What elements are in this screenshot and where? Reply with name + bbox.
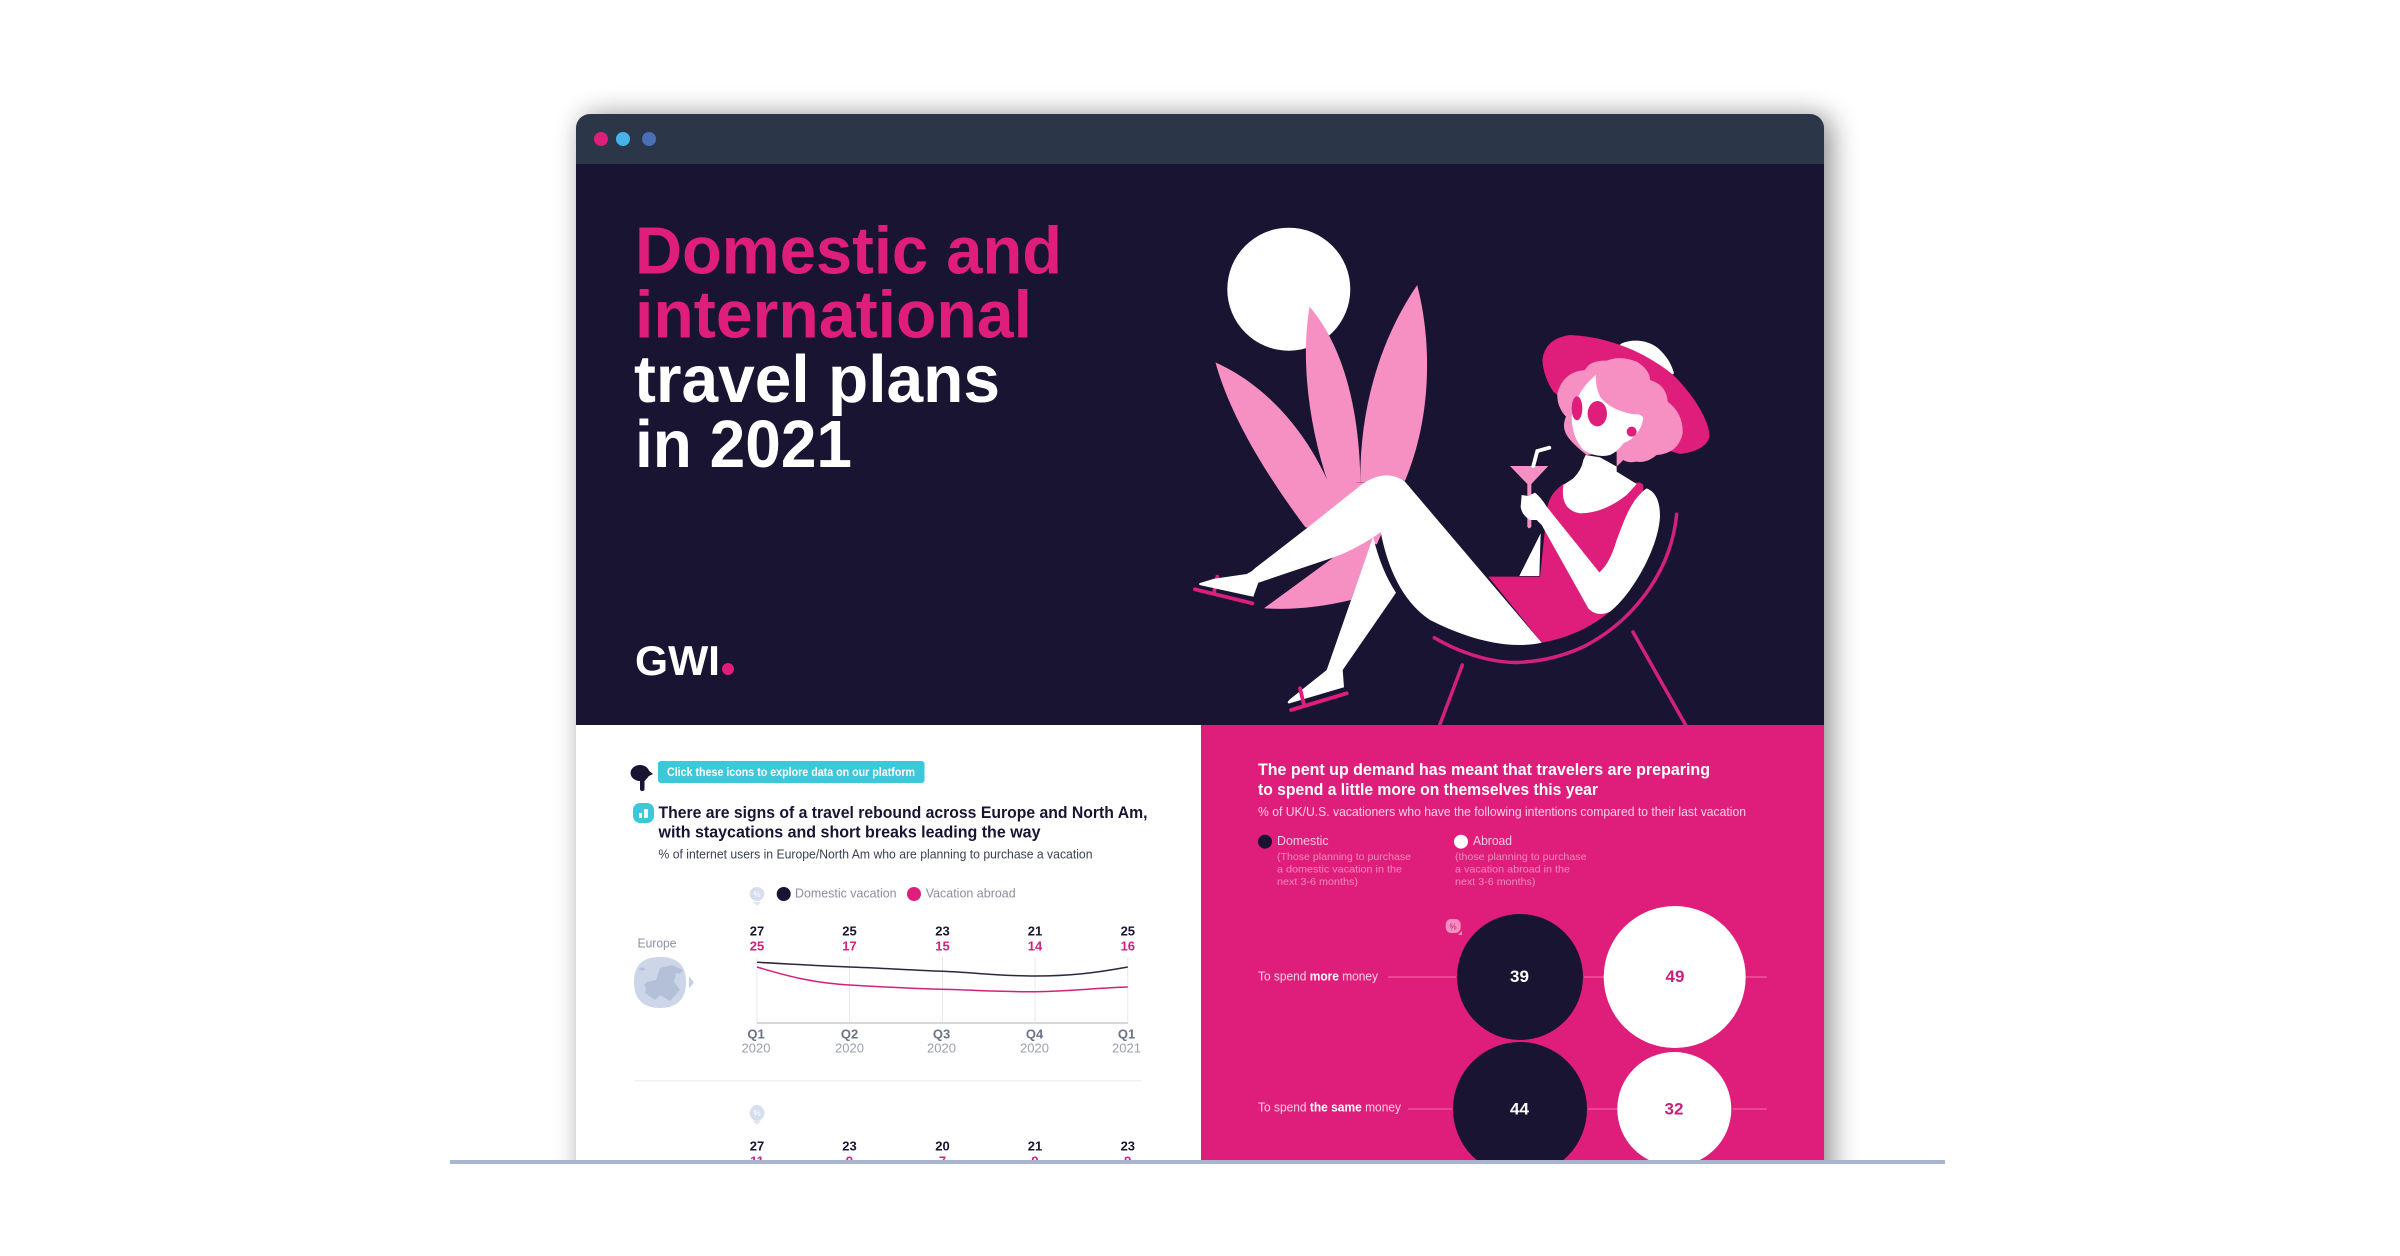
dress <box>1488 483 1643 643</box>
values: second chart domestic: 20 <box>935 1139 950 1154</box>
hair <box>1557 358 1683 467</box>
icon: percent pin: % <box>753 890 761 899</box>
sunglasses and earring <box>1572 396 1637 437</box>
row: spend more <box>1258 906 1746 1048</box>
values: second chart domestic <box>750 1139 1135 1154</box>
sun <box>1227 228 1350 351</box>
title: travel plans <box>634 342 1000 417</box>
arm and hand <box>1521 488 1660 614</box>
lower leg <box>1288 538 1396 704</box>
heading: pent up demand: The pent up demand has meant that travelers are preparing <box>1258 760 1710 779</box>
GWI logo: GWI <box>635 637 720 684</box>
values: second chart domestic: 23 <box>842 1139 857 1154</box>
legend: abroad <box>1454 834 1587 888</box>
values: second chart abroad (cropped) <box>750 1154 1131 1169</box>
plant leaves <box>1216 285 1427 544</box>
values: vacation abroad <box>750 938 1135 953</box>
values: domestic vacation <box>750 923 1135 938</box>
axis quarters: Q3 <box>933 1026 950 1041</box>
axis quarters <box>747 1026 1135 1041</box>
values: second chart abroad (cropped): 11 <box>750 1154 764 1169</box>
row: spend the same: 32 <box>1665 1100 1683 1118</box>
values: second chart domestic: 21 <box>1028 1139 1042 1154</box>
white area below the base line <box>0 1162 2400 1256</box>
values: domestic vacation: 23 <box>935 923 950 938</box>
values: vacation abroad: 25 <box>750 938 764 953</box>
hero panel background <box>576 164 1824 725</box>
legend: domestic: (Those planning to purchase <box>1277 851 1411 863</box>
legend: domestic <box>1258 834 1411 888</box>
heading: travel rebound <box>658 803 1148 841</box>
lower plant leaf <box>1264 538 1373 609</box>
icon: percent pin 2 <box>750 1105 764 1125</box>
icon: percent pin 2: % <box>753 1109 761 1118</box>
values: second chart domestic: 23 <box>1121 1139 1135 1154</box>
icon: percent bubble: % <box>1449 922 1457 932</box>
axis years: 2020 <box>742 1041 770 1056</box>
row: spend the same: To spend the same money <box>1258 1101 1402 1115</box>
raised leg and thigh <box>1199 475 1542 645</box>
browser window title bar <box>576 114 1824 164</box>
values: domestic vacation: 27 <box>750 923 764 938</box>
legend: abroad: a vacation abroad in the <box>1455 864 1570 876</box>
line chart: Europe <box>742 923 1141 1056</box>
values: second chart abroad (cropped): 9 <box>1124 1154 1131 1169</box>
line: domestic vacation <box>757 962 1128 976</box>
values: vacation abroad: 16 <box>1121 938 1135 953</box>
row: spend more: 39 <box>1510 967 1529 986</box>
heading: travel rebound: There are signs of a travel rebound across Europe and North Am, <box>658 803 1148 822</box>
chair <box>1434 514 1686 725</box>
line: vacation abroad <box>757 967 1128 992</box>
heading: travel rebound: with staycations and short breaks leading the way <box>658 822 1041 841</box>
callout: platform hint: Click these icons to explore data on our platform <box>667 767 915 779</box>
axis quarters: Q4 <box>1026 1026 1044 1041</box>
title: in 2021 <box>635 407 852 482</box>
icon: chart badge <box>633 803 654 823</box>
illustration: woman with cocktail on a chair <box>1195 228 1709 725</box>
title: international <box>635 278 1032 352</box>
values: second chart abroad (cropped): 9 <box>846 1154 853 1169</box>
title: Domestic and <box>635 214 1062 288</box>
row: spend more: To spend more money <box>1258 969 1379 983</box>
axis quarters: Q1 <box>747 1026 765 1041</box>
axis quarters: Q1 <box>1118 1026 1135 1041</box>
face <box>1572 375 1643 456</box>
heading: pent up demand: to spend a little more on themselves this year <box>1258 780 1598 799</box>
values: vacation abroad: 17 <box>842 938 857 953</box>
left white panel <box>576 725 1201 1162</box>
legend: abroad: next 3-6 months) <box>1455 876 1536 888</box>
legend: abroad: Abroad <box>1473 834 1512 848</box>
head with hat, hair and sunglasses <box>1542 335 1709 467</box>
torso, neck and chest <box>1519 455 1637 576</box>
axis years: 2020 <box>835 1041 864 1056</box>
subheading: pink panel: % of UK/U.S. vacationers who have the following intentions compared to their last vacation <box>1258 805 1746 819</box>
Europe label and globe: Europe <box>638 936 677 950</box>
icon: percent bubble <box>1446 919 1462 935</box>
pink panel <box>1201 725 1824 1162</box>
values: second chart domestic: 27 <box>750 1139 764 1154</box>
icon: percent pin <box>750 887 764 906</box>
values: domestic vacation: 25 <box>842 923 857 938</box>
legend: domestic: next 3-6 months) <box>1277 876 1358 888</box>
axis quarters: Q2 <box>841 1026 858 1041</box>
axis years: 2021 <box>1112 1041 1141 1056</box>
callout: platform hint <box>630 761 924 791</box>
row: spend more: 49 <box>1666 967 1684 986</box>
row: spend the same <box>1258 1042 1731 1176</box>
legend: domestic: Domestic <box>1277 834 1329 848</box>
values: vacation abroad: 14 <box>1028 938 1043 953</box>
values: second chart abroad (cropped): 9 <box>1031 1154 1039 1169</box>
chart legend <box>777 887 1016 901</box>
axis years: 2020 <box>1020 1041 1049 1056</box>
legend: domestic: a domestic vacation in the <box>1277 864 1402 876</box>
chart legend: Vacation abroad <box>926 887 1016 901</box>
subheading: % of internet users in Europe/North Am who are planning to purchase a vacation <box>658 848 1093 862</box>
values: domestic vacation: 25 <box>1121 923 1135 938</box>
values: second chart abroad (cropped): 7 <box>939 1154 946 1169</box>
axis years <box>742 1041 1141 1056</box>
axis years: 2020 <box>927 1041 956 1056</box>
values: domestic vacation: 21 <box>1028 923 1042 938</box>
icon: pointing hand <box>630 765 653 791</box>
row: spend the same: 44 <box>1510 1100 1529 1118</box>
window shadow <box>583 116 1831 1196</box>
cocktail <box>1510 448 1549 528</box>
chart legend: Domestic vacation <box>795 887 897 901</box>
heading: pent up demand <box>1258 760 1710 799</box>
Europe label and globe <box>634 936 694 1008</box>
legend: abroad: (those planning to purchase <box>1455 851 1587 863</box>
title <box>634 214 1062 482</box>
sandals <box>1195 577 1347 710</box>
values: vacation abroad: 15 <box>935 938 950 953</box>
base line <box>450 1160 1945 1164</box>
hat <box>1542 335 1709 454</box>
connector lines <box>1388 977 1767 1109</box>
